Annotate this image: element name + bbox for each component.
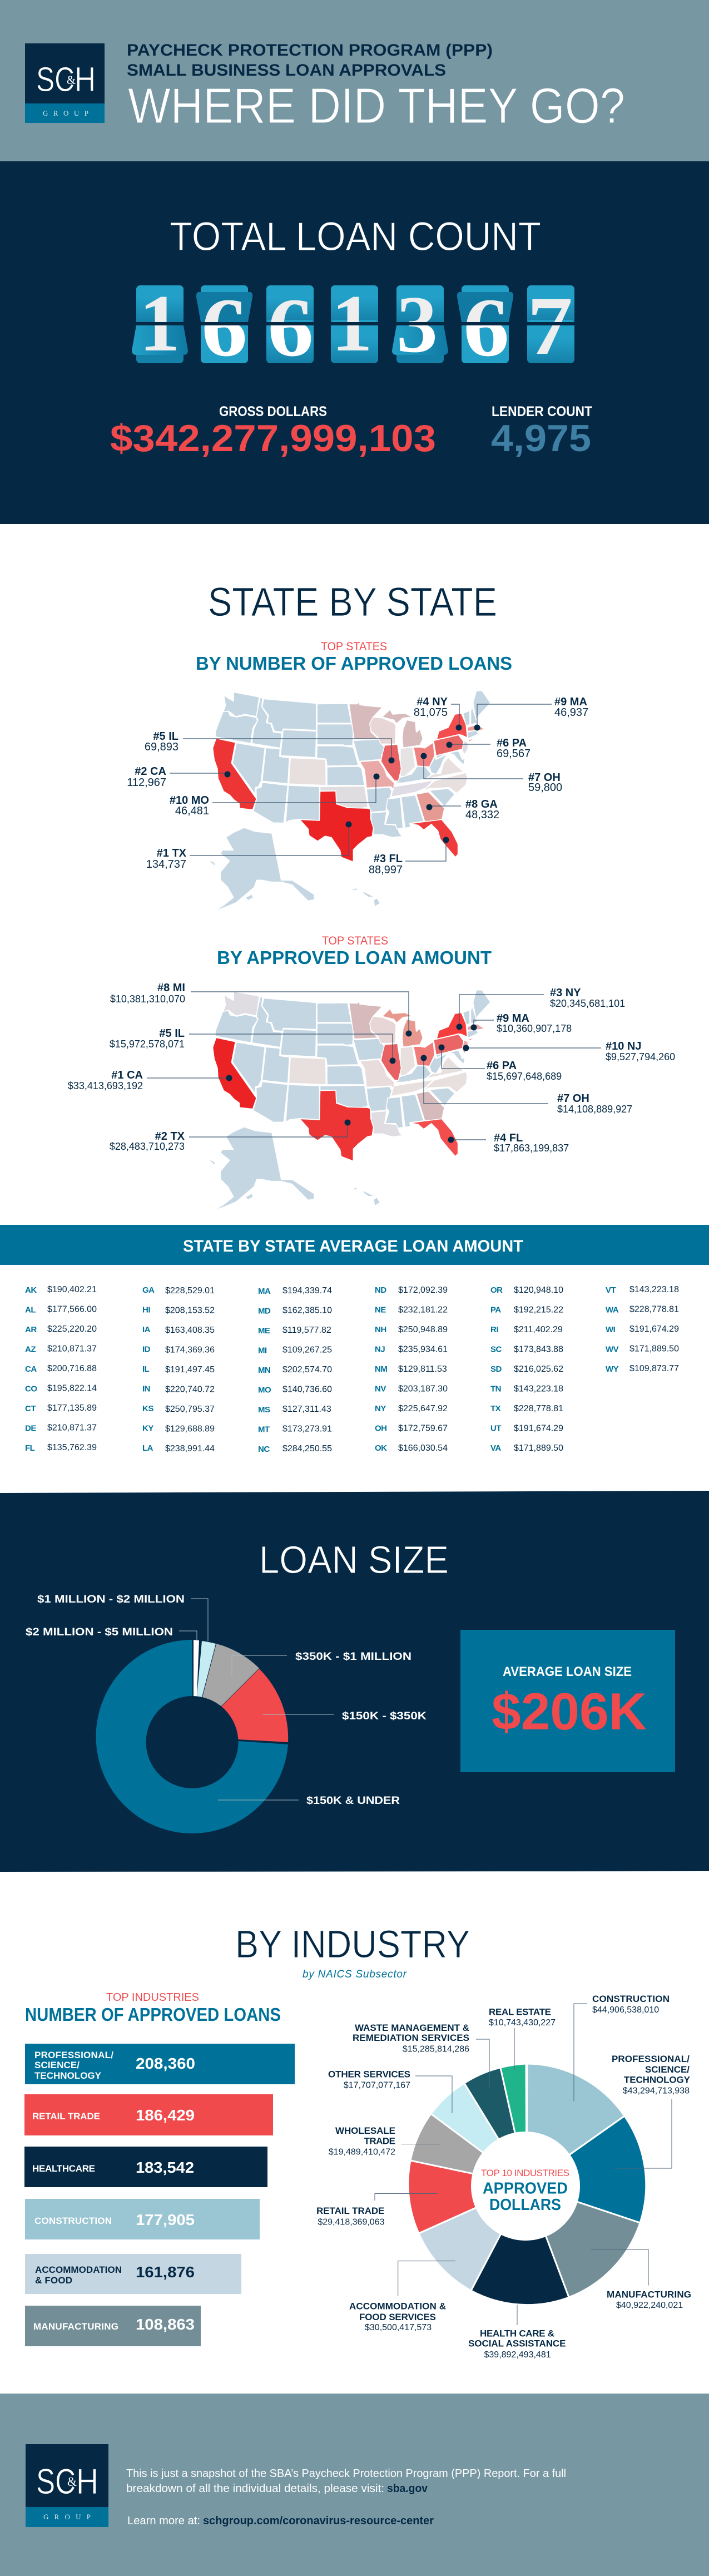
stat: gross dollars: $342,277,999,103	[110, 417, 436, 459]
table: average loan amount by state: TN	[490, 1384, 501, 1394]
table: average loan amount by state: IA	[142, 1325, 151, 1334]
table: average loan amount by state: $211,402.29	[514, 1325, 563, 1334]
map labels: #6 PA	[487, 1060, 517, 1072]
map labels: #8 GA	[465, 798, 498, 810]
bar: construction: CONSTRUCTION	[34, 2216, 112, 2226]
table: average loan amount by state: CO	[25, 1384, 37, 1394]
label: manufacturing: MANUFACTURING	[607, 2290, 691, 2300]
bar: professional science technology: SCIENCE/	[34, 2060, 80, 2070]
table: average loan amount by state: $235,934.61	[398, 1345, 448, 1354]
heading: total loan count: TOTAL LOAN COUNT	[170, 215, 541, 259]
flip counter	[131, 278, 581, 374]
table: average loan amount by state: $119,577.82	[282, 1326, 331, 1335]
table: average loan amount by state: $228,529.01	[165, 1286, 215, 1296]
label: waste management: WASTE MANAGEMENT &	[355, 2023, 469, 2033]
label: construction: CONSTRUCTION	[592, 1994, 670, 2004]
table: average loan amount by state: $109,267.25	[282, 1345, 332, 1355]
label: manufacturing: $40,922,240,021	[616, 2301, 683, 2310]
map: states by approved loan amount	[68, 982, 675, 1209]
label: retail trade: $29,418,369,063	[318, 2217, 385, 2227]
table: average loan amount by state: WA	[606, 1305, 619, 1315]
table: average loan amount by state: $228,778.81	[629, 1305, 679, 1314]
table: average loan amount by state: $171,889.50	[629, 1344, 679, 1354]
bar: professional science technology: PROFESSIONAL/	[34, 2050, 113, 2060]
callout: average loan size	[460, 1630, 675, 1772]
map labels: #7 OH	[557, 1092, 589, 1105]
table: average loan amount by state: MI	[258, 1346, 267, 1355]
bar: retail trade	[24, 2094, 273, 2135]
label: accommodation and food services: ACCOMMODATION &	[349, 2301, 446, 2312]
table: average loan amount by state: $177,135.89	[47, 1403, 97, 1413]
table: average loan amount by state: SC	[490, 1345, 502, 1354]
label: waste management	[353, 2023, 469, 2054]
logo: SC&H Group: &	[67, 73, 76, 87]
donut leader lines	[179, 1599, 334, 1800]
table: average loan amount by state: ME	[258, 1326, 270, 1336]
table: average loan amount by state: LA	[142, 1443, 153, 1453]
table: average loan amount by state: $202,574.70	[282, 1365, 332, 1374]
table: average loan amount by state: OR	[490, 1285, 503, 1295]
subheading: by number of approved loans	[196, 640, 512, 674]
bar: healthcare: 183,542	[136, 2159, 194, 2176]
table: average loan amount by state: AK	[25, 1285, 37, 1295]
map labels: #3 NY	[550, 987, 581, 999]
logo: SC&H Group: H	[75, 61, 96, 99]
table: average loan amount by state: $216,025.62	[514, 1364, 563, 1374]
map labels: $28,483,710,273	[110, 1141, 185, 1152]
donut center label	[481, 2168, 569, 2214]
map: states by number of approved loans	[127, 691, 588, 910]
label: construction: $44,906,538,010	[592, 2005, 659, 2015]
map labels: 69,893	[145, 741, 179, 753]
table: average loan amount by state: AL	[25, 1305, 36, 1315]
table: average loan amount by state: $173,843.88	[514, 1345, 563, 1354]
map labels: #9 MA	[554, 696, 587, 708]
footer note: breakdown of all the individual details, please visit:	[126, 2483, 384, 2495]
map labels: #9 MA	[497, 1012, 529, 1025]
table: average loan amount by state: MT	[258, 1425, 270, 1434]
bar: professional science technology: 208,360	[136, 2055, 195, 2072]
table: average loan amount by state: SD	[490, 1364, 502, 1374]
table: average loan amount by state: $166,030.54	[398, 1443, 448, 1453]
table: average loan amount by state: $250,948.89	[398, 1325, 448, 1334]
table: average loan amount by state: CA	[25, 1364, 37, 1374]
table: average loan amount by state: ID	[142, 1345, 151, 1354]
label: accommodation and food services: $30,500,417,573	[365, 2323, 432, 2332]
logo: SC&H Group: GROUP	[43, 109, 88, 117]
table: average loan amount by state: NY	[375, 1404, 386, 1413]
table: average loan amount by state: PA	[490, 1305, 501, 1315]
map labels	[68, 982, 675, 1154]
bar: accommodation and food: ACCOMMODATION	[35, 2264, 122, 2275]
map labels: $9,527,794,260	[606, 1051, 675, 1062]
subheading: number of approved loans	[25, 1991, 281, 2025]
bar: professional science technology: TECHNOLOGY	[34, 2070, 102, 2081]
label: retail trade: RETAIL TRADE	[316, 2206, 385, 2216]
map labels: 46,937	[554, 706, 588, 719]
table: average loan amount by state: NJ	[375, 1345, 385, 1354]
table: average loan amount by state: $172,092.39	[398, 1285, 448, 1295]
table: average loan amount by state	[25, 1285, 679, 1454]
table: average loan amount by state: MS	[258, 1405, 270, 1415]
donut labels: $150K & UNDER	[306, 1795, 400, 1807]
map labels: #10 NJ	[606, 1040, 642, 1052]
flip counter: 1	[139, 278, 180, 368]
industry labels	[316, 1994, 691, 2360]
table: average loan amount by state: AR	[25, 1325, 37, 1334]
table: average loan amount by state: FL	[25, 1443, 35, 1453]
label: manufacturing	[607, 2290, 691, 2310]
table: average loan amount by state: $171,889.50	[514, 1443, 563, 1453]
title: WHERE DID THEY GO?	[128, 78, 625, 134]
table: average loan amount by state: NV	[375, 1384, 386, 1394]
table: average loan amount by state: UT	[490, 1424, 501, 1433]
table: average loan amount by state: $194,339.74	[282, 1286, 332, 1296]
map labels: $15,697,648,689	[487, 1071, 562, 1082]
label: wholesale trade	[329, 2125, 395, 2157]
map labels: #2 TX	[155, 1130, 185, 1143]
donut chart: top 10 industries approved dollars	[408, 2064, 646, 2305]
label: wholesale trade: WHOLESALE	[335, 2125, 395, 2136]
map labels: #4 FL	[494, 1132, 523, 1144]
callout: average loan size: $206K	[492, 1682, 647, 1741]
map labels: 69,567	[497, 748, 530, 760]
table: average loan amount by state: $177,566.00	[47, 1305, 97, 1314]
label: accommodation and food services: FOOD SERVICES	[359, 2312, 436, 2322]
panel: loan size	[0, 1491, 709, 1872]
header kicker: SMALL BUSINESS LOAN APPROVALS	[127, 61, 446, 80]
map labels: $10,360,907,178	[497, 1023, 572, 1034]
subheading: number of approved loans: NUMBER OF APPROVED LOANS	[25, 2004, 281, 2025]
table: average loan amount by state: TX	[490, 1404, 501, 1413]
label: professional science technology: PROFESSIONAL/	[612, 2054, 690, 2064]
map labels: 88,997	[369, 864, 403, 876]
heading: loan size: LOAN SIZE	[259, 1538, 449, 1581]
donut labels: $2 MILLION - $5 MILLION	[26, 1626, 173, 1638]
label: professional science technology	[612, 2054, 691, 2096]
table: average loan amount by state: $210,871.37	[47, 1344, 97, 1354]
table: average loan amount by state: OK	[375, 1443, 387, 1453]
label: other services: $17,707,077,167	[344, 2081, 410, 2090]
table: average loan amount by state: $173,273.91	[282, 1424, 332, 1434]
table: average loan amount by state: WV	[606, 1345, 619, 1354]
table: average loan amount by state: IL	[142, 1364, 150, 1374]
heading: state by state: STATE BY STATE	[208, 580, 497, 625]
donut labels: $150K - $350K	[342, 1710, 427, 1722]
label: wholesale trade: TRADE	[364, 2136, 395, 2146]
label: professional science technology: TECHNOLOGY	[624, 2075, 691, 2085]
label: professional science technology: $43,294,713,938	[623, 2086, 690, 2096]
map labels: $14,108,889,927	[557, 1104, 632, 1115]
panel: total loan count	[0, 161, 709, 524]
table: average loan amount by state: $140,736.60	[282, 1385, 332, 1394]
table: average loan amount by state: VT	[606, 1285, 616, 1295]
donut labels: $350K - $1 MILLION	[295, 1651, 411, 1663]
label: health care and social assistance: $39,892,493,481	[484, 2350, 551, 2360]
heading: by industry: BY INDUSTRY	[235, 1922, 470, 1966]
table: average loan amount by state: $162,385.10	[282, 1306, 332, 1315]
callout: average loan size: AVERAGE LOAN SIZE	[503, 1664, 632, 1679]
table: average loan amount by state: $174,369.36	[165, 1345, 215, 1355]
donut center label: APPROVED	[483, 2179, 568, 2197]
map labels: #1 TX	[157, 847, 187, 859]
table: average loan amount by state: $129,811.53	[398, 1364, 447, 1374]
table: average loan amount by state: $135,762.39	[47, 1443, 97, 1452]
logo: SC&H Group	[25, 43, 105, 123]
map labels: $15,972,578,071	[110, 1039, 185, 1050]
subheading: by approved loan amount: TOP STATES	[322, 935, 388, 947]
table: average loan amount by state: VA	[490, 1443, 501, 1453]
bar: accommodation and food: 161,876	[136, 2263, 195, 2281]
map labels: $20,345,681,101	[550, 998, 625, 1009]
map labels: $33,413,693,192	[68, 1080, 143, 1091]
label: waste management: $15,285,814,286	[403, 2045, 469, 2054]
banner: state by state average loan amount	[0, 1225, 709, 1265]
label: other services	[328, 2069, 410, 2090]
table: average loan amount by state: $250,795.37	[165, 1405, 215, 1414]
footer logo: H	[76, 2461, 98, 2501]
table: average loan amount by state: NM	[375, 1364, 387, 1374]
map labels: 112,967	[127, 777, 166, 789]
bar: retail trade: RETAIL TRADE	[32, 2111, 100, 2122]
table: average loan amount by state: $120,948.10	[514, 1285, 563, 1295]
flip counter: 7	[527, 280, 573, 372]
donut labels	[26, 1594, 427, 1807]
map labels: #5 IL	[153, 730, 179, 743]
table: average loan amount by state: KS	[142, 1404, 153, 1413]
footer link: Learn more at:	[127, 2515, 200, 2527]
table: average loan amount by state: $190,402.21	[47, 1285, 97, 1294]
bar: manufacturing: MANUFACTURING	[33, 2321, 118, 2332]
subheading: by number of approved loans: TOP STATES	[321, 640, 387, 653]
map labels: #10 MO	[170, 794, 209, 807]
footer note: This is just a snapshot of the SBA’s Paycheck Protection Program (PPP) Report. For a full	[126, 2468, 566, 2480]
table: average loan amount by state: WI	[606, 1325, 616, 1334]
flip counter: 1	[331, 278, 373, 368]
table: average loan amount by state: CT	[25, 1404, 36, 1413]
table: average loan amount by state: AZ	[25, 1345, 36, 1354]
table: average loan amount by state: GA	[142, 1285, 155, 1295]
subheading: number of approved loans: TOP INDUSTRIES	[106, 1991, 199, 2004]
bar: accommodation and food	[25, 2254, 241, 2294]
donut chart: loan size distribution	[96, 1640, 288, 1833]
heading: by industry: by NAICS Subsector	[303, 1969, 407, 1980]
industry leader lines	[375, 2004, 672, 2325]
label: professional science technology: SCIENCE/	[645, 2064, 690, 2075]
table: average loan amount by state: $228,778.81	[514, 1404, 563, 1413]
table: average loan amount by state: $127,311.43	[282, 1405, 331, 1414]
header kicker: PAYCHECK PROTECTION PROGRAM (PPP)	[127, 41, 493, 60]
bar: manufacturing: 108,863	[136, 2316, 195, 2333]
table: average loan amount by state: NH	[375, 1325, 386, 1334]
footer logo: SC	[36, 2461, 76, 2501]
table: average loan amount by state: $220,740.72	[165, 1385, 215, 1394]
flip counter: 6	[201, 281, 247, 374]
stat: lender count: LENDER COUNT	[492, 404, 592, 419]
bar: retail trade: 186,429	[136, 2107, 195, 2124]
label: other services: OTHER SERVICES	[328, 2069, 410, 2079]
table: average loan amount by state: $172,759.67	[398, 1424, 448, 1433]
table: average loan amount by state: $143,223.18	[514, 1384, 563, 1394]
bar: healthcare: HEALTHCARE	[32, 2163, 95, 2174]
table: average loan amount by state: $192,215.22	[514, 1305, 563, 1315]
map labels: $17,863,199,837	[494, 1143, 569, 1154]
label: accommodation and food services	[349, 2301, 446, 2332]
flip counter: 3	[396, 279, 438, 369]
table: average loan amount by state: $200,716.88	[47, 1364, 97, 1373]
map labels: #2 CA	[135, 765, 166, 778]
table: average loan amount by state: NC	[258, 1445, 270, 1454]
table: average loan amount by state: DE	[25, 1424, 36, 1433]
banner: state by state average loan amount: STATE BY STATE AVERAGE LOAN AMOUNT	[183, 1237, 523, 1255]
map labels: #3 FL	[374, 853, 403, 865]
table: average loan amount by state: KY	[142, 1424, 153, 1433]
label: health care and social assistance: HEALTH CARE &	[480, 2328, 554, 2338]
bar: construction: 177,905	[136, 2211, 195, 2228]
table: average loan amount by state: ND	[375, 1285, 386, 1295]
map labels: #4 NY	[417, 696, 448, 708]
table: average loan amount by state: MA	[258, 1287, 271, 1296]
map labels: 81,075	[414, 706, 448, 719]
map labels: 59,800	[528, 782, 562, 794]
label: real estate: REAL ESTATE	[489, 2007, 551, 2017]
footer link: schgroup.com/coronavirus-resource-center	[203, 2515, 434, 2527]
map labels: $10,381,310,070	[110, 993, 185, 1005]
table: average loan amount by state: $210,871.37	[47, 1423, 97, 1433]
donut labels: $1 MILLION - $2 MILLION	[37, 1594, 185, 1605]
map labels: #5 IL	[159, 1027, 185, 1040]
table: average loan amount by state: $232,181.22	[398, 1305, 448, 1315]
table: average loan amount by state: $225,220.20	[47, 1324, 97, 1334]
footer note	[126, 2468, 566, 2495]
label: retail trade	[316, 2206, 385, 2227]
bar chart: top industries	[24, 2044, 295, 2346]
table: average loan amount by state: OH	[375, 1424, 387, 1433]
table: average loan amount by state: RI	[490, 1325, 498, 1334]
donut center label: TOP 10 INDUSTRIES	[481, 2168, 569, 2178]
map labels: 46,481	[175, 805, 209, 817]
table: average loan amount by state: $129,688.89	[165, 1424, 215, 1434]
donut center label: DOLLARS	[489, 2196, 561, 2214]
logo: SC&H Group: SC	[36, 61, 75, 99]
flip counter: 6	[267, 281, 314, 374]
map labels: 48,332	[465, 809, 499, 821]
table: average loan amount by state: MN	[258, 1366, 270, 1375]
map labels: 134,737	[146, 858, 186, 871]
footer logo: &	[67, 2475, 77, 2489]
label: real estate	[489, 2007, 556, 2028]
bar: healthcare	[24, 2147, 267, 2187]
footer band	[0, 2394, 709, 2576]
table: average loan amount by state: IN	[142, 1384, 150, 1394]
flip counter: 6	[463, 281, 509, 374]
bar: accommodation and food: & FOOD	[35, 2275, 72, 2286]
table: average loan amount by state: $238,991.44	[165, 1444, 215, 1453]
bar: construction	[25, 2199, 260, 2239]
map labels: #6 PA	[497, 737, 527, 749]
heading: by industry	[235, 1922, 470, 1980]
footer logo: GROUP	[43, 2513, 91, 2521]
table: average loan amount by state: $208,153.52	[165, 1306, 215, 1315]
table: average loan amount by state: $163,408.35	[165, 1326, 215, 1335]
table: average loan amount by state: $109,873.77	[629, 1364, 679, 1373]
footer note: sba.gov	[387, 2483, 428, 2495]
table: average loan amount by state: MO	[258, 1385, 271, 1395]
footer logo	[26, 2444, 108, 2527]
label: real estate: $10,743,430,227	[489, 2018, 556, 2028]
table: average loan amount by state: $203,187.30	[398, 1384, 448, 1394]
bar: professional science technology	[25, 2044, 295, 2084]
header band	[0, 0, 709, 161]
label: construction	[592, 1994, 670, 2015]
label: wholesale trade: $19,489,410,472	[329, 2148, 395, 2157]
map labels	[127, 696, 588, 876]
table: average loan amount by state: NE	[375, 1305, 386, 1315]
table: average loan amount by state: $191,497.45	[165, 1365, 215, 1374]
table: average loan amount by state: $191,674.29	[514, 1424, 563, 1433]
table: average loan amount by state: HI	[142, 1305, 150, 1315]
header kicker	[127, 41, 493, 80]
table: average loan amount by state: $225,647.92	[398, 1404, 448, 1413]
stat: lender count: 4,975	[491, 417, 591, 459]
table: average loan amount by state: $143,223.18	[629, 1285, 679, 1294]
table: average loan amount by state: $195,822.14	[47, 1384, 97, 1393]
table: average loan amount by state: $284,250.55	[282, 1444, 332, 1453]
map labels: #1 CA	[111, 1069, 143, 1081]
subheading: by number of approved loans: BY NUMBER OF APPROVED LOANS	[196, 653, 512, 674]
bar: manufacturing	[25, 2306, 201, 2346]
map labels: #7 OH	[528, 772, 561, 784]
table: average loan amount by state: WY	[606, 1364, 619, 1374]
subheading: by approved loan amount: BY APPROVED LOAN AMOUNT	[217, 947, 492, 968]
table: average loan amount by state: $191,674.29	[629, 1324, 679, 1334]
map labels: #8 MI	[157, 982, 185, 994]
stat: gross dollars: GROSS DOLLARS	[219, 404, 327, 419]
label: waste management: REMEDIATION SERVICES	[353, 2033, 469, 2043]
table: average loan amount by state: MD	[258, 1306, 271, 1316]
label: health care and social assistance	[468, 2328, 566, 2360]
label: health care and social assistance: SOCIAL ASSISTANCE	[468, 2338, 566, 2349]
subheading: by approved loan amount	[217, 935, 492, 968]
